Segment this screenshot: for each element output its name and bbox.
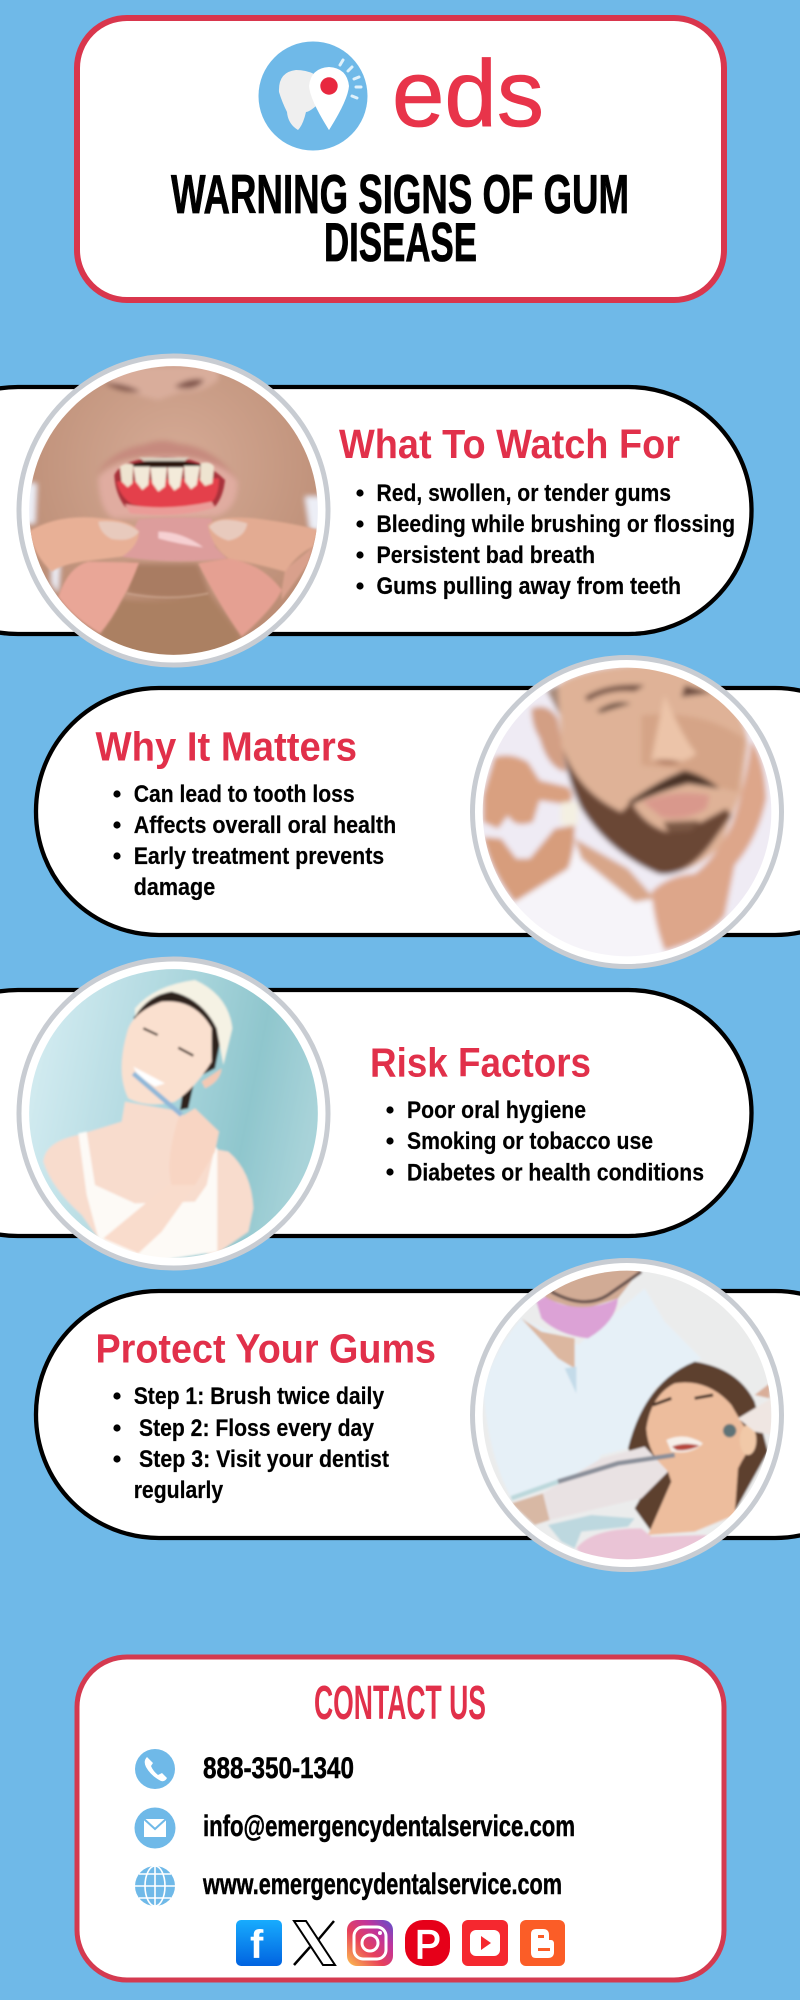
social icons: [236, 1920, 565, 1967]
bullet list: Early treatment prevents: [134, 843, 384, 870]
pill background: [36, 1291, 800, 1538]
bullet list: Persistent bad breath: [376, 542, 595, 569]
bullet list: Step 1: Brush twice daily: [134, 1383, 385, 1410]
icon: globe: [135, 1866, 175, 1906]
bullet list: Bleeding while brushing or flossing: [376, 511, 735, 538]
icon: phone: [135, 1749, 175, 1789]
bullet list: Diabetes or health conditions: [407, 1160, 704, 1186]
bullet list: damage: [134, 874, 215, 901]
icon: facebook: [236, 1920, 282, 1967]
panel: risk factors: [0, 958, 752, 1272]
icon: instagram: [347, 1920, 393, 1966]
logo: [258, 41, 544, 150]
title: [171, 163, 629, 273]
panel: protect your gums: [36, 1258, 800, 1572]
icon: youtube: [462, 1920, 508, 1966]
bullet list: Can lead to tooth loss: [134, 781, 355, 808]
logo wordmark: eds: [392, 41, 544, 147]
website: www.emergencydentalservice.com: [202, 1868, 562, 1901]
icon: pinterest: [405, 1920, 450, 1967]
heading: Risk Factors: [370, 1040, 591, 1086]
bullet list: Red, swollen, or tender gums: [376, 480, 671, 507]
bullet list: Gums pulling away from teeth: [376, 573, 681, 600]
icon: x: [294, 1921, 335, 1965]
title: DISEASE: [324, 211, 477, 273]
heading: What To Watch For: [339, 421, 680, 467]
panel: contact us: [77, 1657, 724, 1980]
phone number: 888-350-1340: [203, 1752, 354, 1785]
bullet list: [113, 1383, 389, 1504]
icon: tooth location badge: [258, 42, 368, 150]
bullet list: Poor oral hygiene: [407, 1097, 586, 1124]
heading: Why It Matters: [96, 724, 357, 770]
header card: [77, 18, 724, 300]
contact card: [77, 1657, 724, 1980]
panel: why it matters: [36, 658, 800, 966]
bullet list: [386, 1097, 704, 1186]
heading: Protect Your Gums: [96, 1326, 436, 1372]
bullet list: [356, 480, 735, 600]
bullet list: Step 2: Floss every day: [139, 1415, 375, 1442]
bullet list: regularly: [134, 1477, 224, 1504]
panel: what to watch for: [0, 356, 752, 665]
bullet list: Affects overall oral health: [134, 812, 396, 839]
bullet list: [113, 781, 396, 901]
panel: header: [77, 18, 724, 300]
email address: info@emergencydentalservice.com: [203, 1810, 575, 1843]
photo: inflamed gums: [19, 356, 328, 665]
icon: facebook: f: [250, 1923, 264, 1967]
pill background: [36, 688, 800, 935]
photo: woman brushing teeth: [18, 958, 332, 1272]
contact heading: CONTACT US: [314, 1677, 486, 1730]
pill background: [0, 387, 752, 634]
icon: blogger: [520, 1920, 565, 1966]
bullet list: Smoking or tobacco use: [407, 1128, 653, 1155]
icon: pinterest: P: [415, 1923, 441, 1967]
photo: dentist with patient: [471, 1258, 785, 1572]
pill background: [0, 990, 752, 1236]
photo: man holding tooth: [472, 658, 782, 966]
icon: email: [134, 1808, 176, 1848]
bullet list: Step 3: Visit your dentist: [139, 1446, 389, 1473]
